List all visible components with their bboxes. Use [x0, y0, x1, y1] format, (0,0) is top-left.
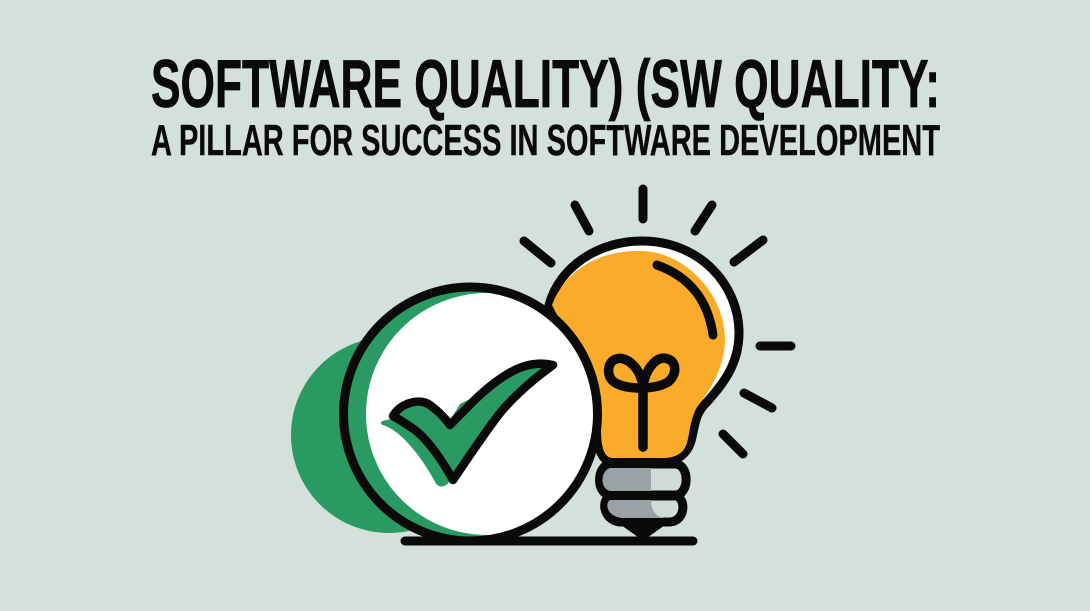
check sliver	[450, 398, 472, 425]
bulb highlight arc	[657, 265, 713, 335]
icon: light bulb	[549, 241, 739, 537]
badge green backing	[344, 287, 598, 541]
badge white face	[366, 293, 608, 535]
bulb filament	[609, 358, 675, 447]
badge outline	[344, 287, 598, 541]
check shadow	[383, 420, 448, 484]
bulb screw base	[600, 464, 686, 537]
infographic canvas	[152, 58, 940, 546]
icon: light rays	[524, 189, 791, 454]
title	[151, 46, 940, 165]
bulb glass	[549, 241, 739, 462]
check mark	[393, 364, 553, 480]
ground line	[405, 536, 693, 546]
icon: check badge	[344, 287, 608, 541]
green back circle	[291, 337, 487, 533]
bulb orange fill	[552, 251, 725, 458]
